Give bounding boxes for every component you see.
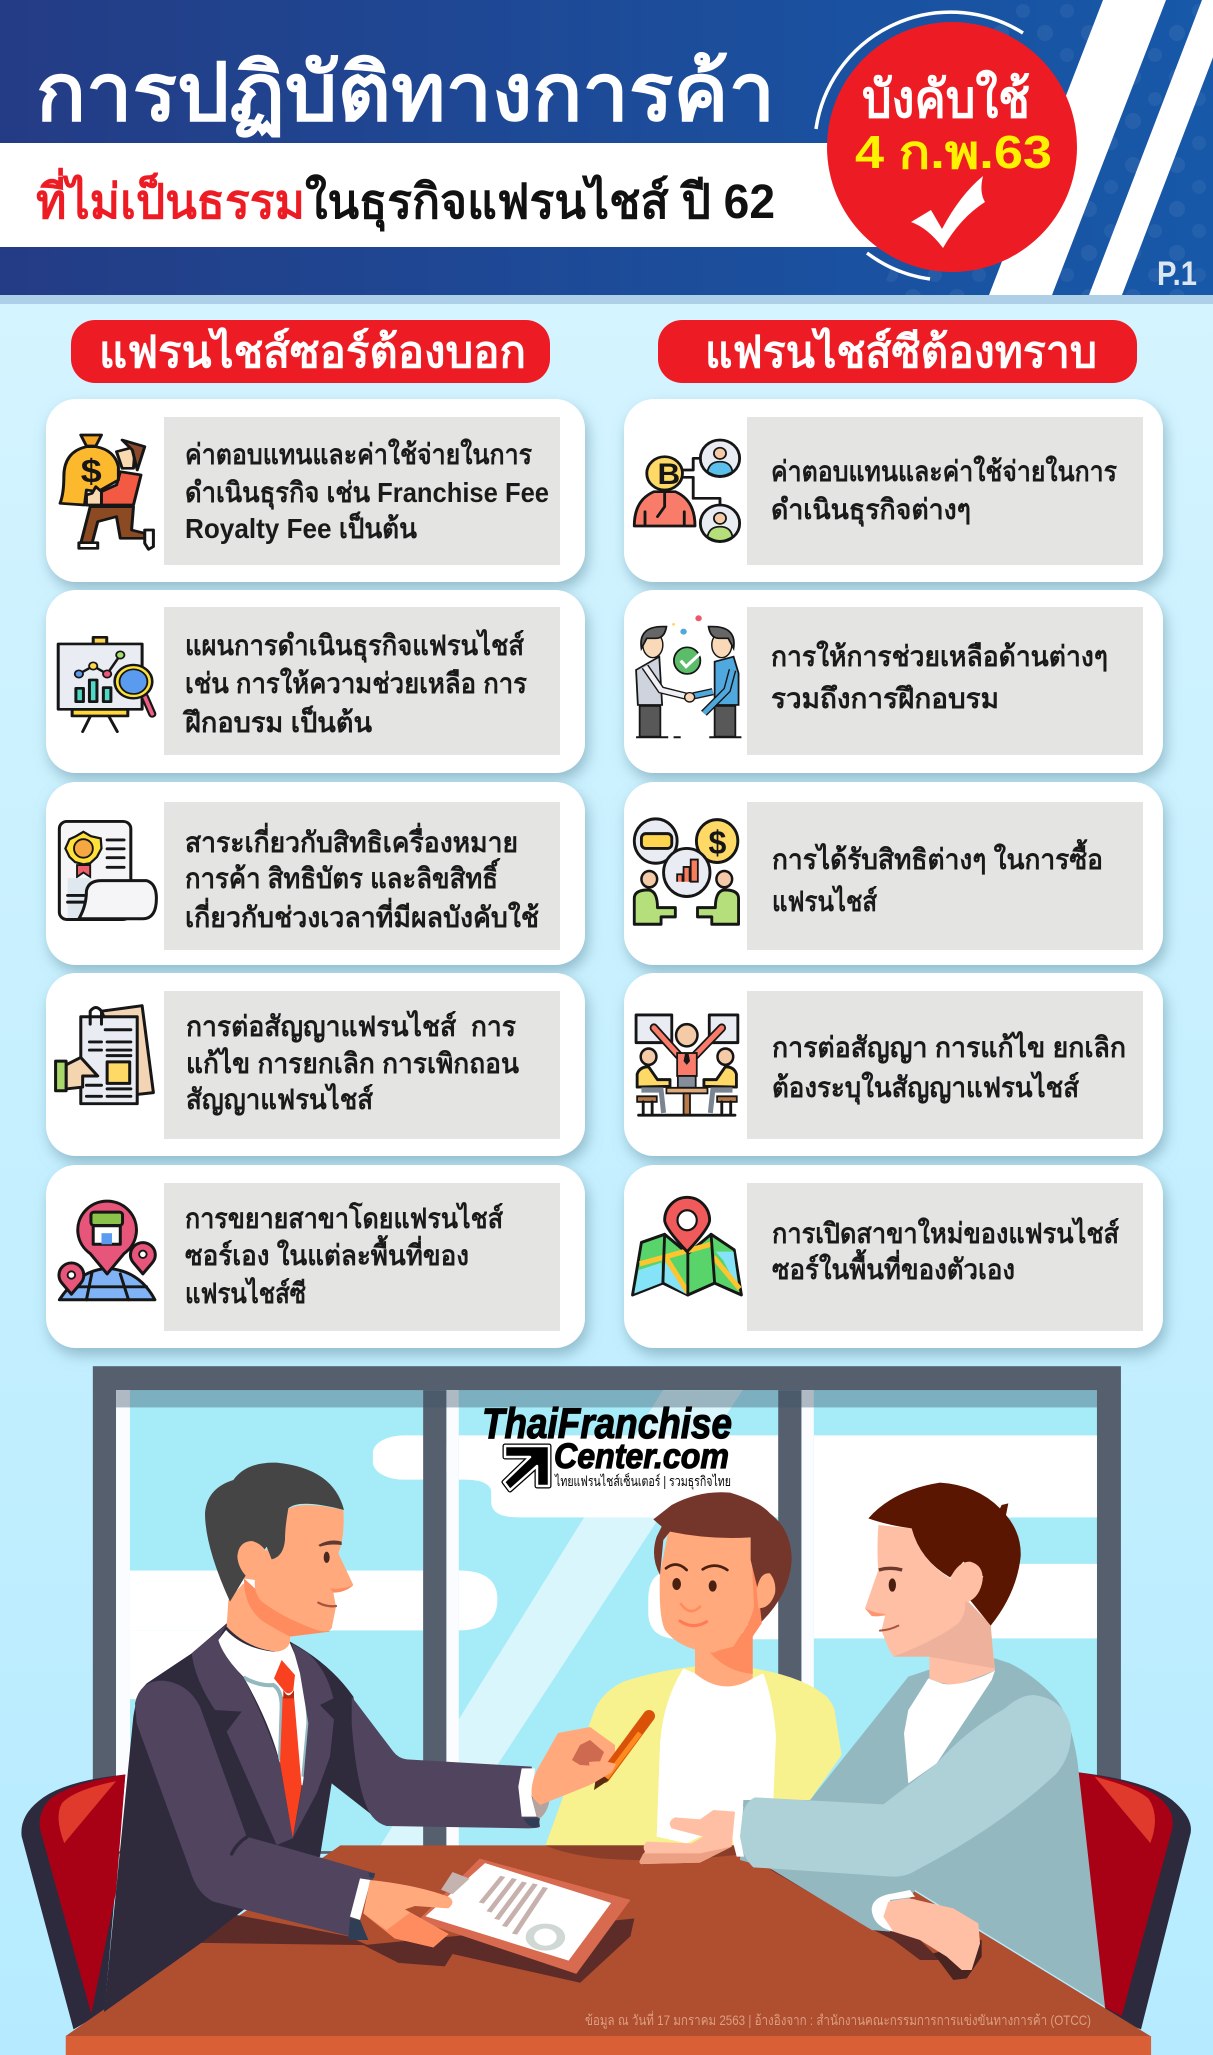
item text: รวมถึงการฝึกอบรม [771,683,999,714]
panel: franchisee item 1 [624,399,1163,582]
icon: two people discussing finance [634,819,739,924]
person: yellow jacket [545,1492,842,1847]
panel: franchisee item 5 [624,1165,1163,1348]
badge: effective date [816,12,1077,279]
item text [185,822,539,933]
panel: franchisor item 3 [46,782,585,965]
panel: franchisor item 2 [46,590,585,773]
hand holding clipboard [348,1873,452,1947]
panel: franchisor item 4 [46,973,585,1156]
item text [186,1010,519,1116]
header banner [0,0,1213,304]
item text: สัญญาแฟรนไชส์ [186,1083,374,1116]
item text: ฝึกอบรม เป็นต้น [182,705,372,738]
item text [185,1201,504,1309]
source note: ข้อมูล ณ วันที่ 17 มกราคม 2563 | อ้างอิงจาก : สำนักงานคณะกรรมการการแข่งขันทางการค้า (OTCC) [585,2011,1091,2029]
item text: แผนการดำเนินธุรกิจแฟรนไชส์ [185,629,525,663]
window [93,1366,1121,1854]
icon: man carrying money bag: $ [81,453,102,490]
heading: franchisor [71,320,550,383]
item text: การได้รับสิทธิต่างๆ ในการซื้อ [772,838,1103,875]
item text: ต้องระบุในสัญญาแฟรนไชส์ [772,1071,1080,1105]
item text: การเปิดสาขาใหม่ของแฟรนไชส์ [772,1217,1120,1249]
heading: franchisee: แฟรนไชส์ซีต้องทราบ [705,326,1097,377]
icon: meeting room [636,1015,738,1115]
person: man in suit [104,1463,550,2012]
item text: ดำเนินธุรกิจ เช่น Franchise Fee [185,477,549,510]
logo: ThaiFranchise Center.com: ThaiFranchise [482,1400,732,1448]
badge: effective date: บังคับใช้ [862,69,1030,129]
icon: bitcoin businessman network [634,440,740,542]
panel: franchisee item 2 [624,590,1163,773]
clipboard contract [364,1859,634,1983]
heading: franchisee [658,320,1137,383]
icon: handshake [636,615,741,737]
panel: franchisee item 4 [624,973,1163,1156]
title line 1: การปฏิบัติทางการค้า [36,48,775,138]
icon: certificate [59,821,156,919]
item text: การให้การช่วยเหลือด้านต่างๆ [771,640,1108,672]
item text [772,1031,1126,1105]
hand with pen [532,1716,649,1805]
item text [185,438,549,544]
item text: ซอร์เอง ในแต่ละพื้นที่ของ [185,1234,469,1271]
icon: man carrying money bag [60,435,153,549]
item text: ดำเนินธุรกิจต่างๆ [771,494,971,527]
item text [771,640,1108,714]
panel: franchisor item 5 [46,1165,585,1348]
item text: Royalty Fee เป็นต้น [185,511,417,544]
meeting table [66,1845,1151,2055]
item text: ซอร์ในพื้นที่ของตัวเอง [772,1248,1015,1285]
red chair left [21,1774,125,2029]
panel: franchisee item 3 [624,782,1163,965]
panel: franchisor item 1 [46,399,585,582]
item text [772,1217,1120,1285]
title line 2: ที่ไม่เป็นธรรมในธุรกิจแฟรนไชส์ ปี 62 [36,167,775,232]
logo: ThaiFranchise Center.com: ไทยแฟรนไชส์เซ็นเตอร์ | รวมธุรกิจไทย [554,1472,731,1490]
item text: แก้ไข การยกเลิก การเพิกถอน [186,1047,519,1079]
item text [772,838,1103,917]
person: teal blazer [640,1483,1105,2007]
heading: franchisor: แฟรนไชส์ซอร์ต้องบอก [99,326,526,377]
red chair right [1078,1772,1191,2029]
item text: การขยายสาขาโดยแฟรนไชส์ [185,1201,504,1234]
page number: P.1 [1157,255,1197,293]
icon: bitcoin businessman network: B [657,458,680,491]
item text: แฟรนไชส์ซี [185,1277,306,1309]
item text [771,455,1117,527]
badge: effective date: 4 ก.พ.63 [855,126,1052,178]
item text: ค่าตอบแทนและค่าใช้จ่ายในการ [771,455,1117,487]
icon: contract document in hand [56,1006,153,1104]
item text: เกี่ยวกับช่วงเวลาที่มีผลบังคับใช้ [185,897,539,933]
item text: การต่อสัญญา การแก้ไข ยกเลิก [772,1031,1126,1064]
icon: map with location pin [632,1197,741,1295]
illustration: business meeting signing a contract [21,1366,1191,2055]
icon: shop location pin on globe [59,1201,155,1300]
item text: การต่อสัญญาแฟรนไชส์ การ [186,1010,516,1043]
item text [182,629,527,738]
logo: ThaiFranchise Center.com [482,1400,732,1490]
logo: ThaiFranchise Center.com: Center.com [554,1437,729,1476]
icon: presentation board with magnifier [58,637,152,732]
icon: two people discussing finance: $ [709,823,726,861]
item text: การค้า สิทธิบัตร และลิขสิทธิ์ [185,858,500,894]
item text: เช่น การให้ความช่วยเหลือ การ [185,667,527,699]
item text: แฟรนไชส์ [772,885,878,917]
item text: ค่าตอบแทนและค่าใช้จ่ายในการ [185,438,532,470]
item text: สาระเกี่ยวกับสิทธิเครื่องหมาย [185,822,518,858]
